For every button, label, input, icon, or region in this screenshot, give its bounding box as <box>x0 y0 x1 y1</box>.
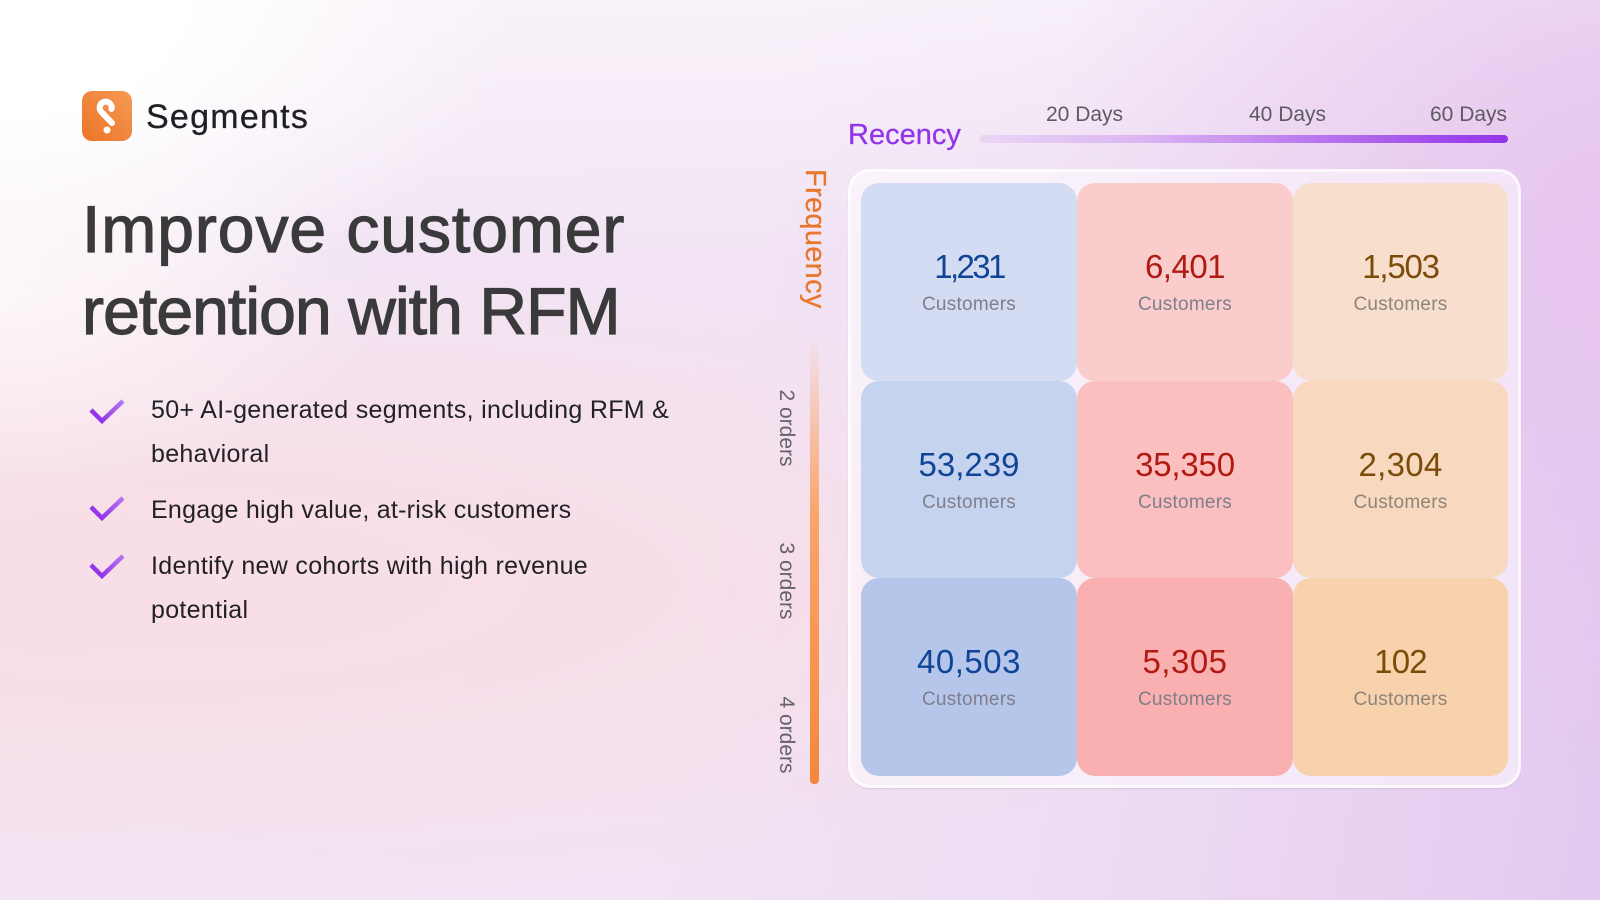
matrix cell 35,350: 35,350 <box>1135 446 1235 482</box>
matrix cell 1,231: 1,231 <box>934 248 1004 285</box>
matrix cell 102: Customers <box>1353 689 1448 710</box>
matrix cell 5,305: 5,305 <box>1142 643 1228 680</box>
frequency ticks <box>775 389 798 774</box>
matrix cell 40,503: 40,503 <box>917 643 1021 680</box>
matrix cell 1,231: Customers <box>922 294 1016 315</box>
matrix cell 5,305: Customers <box>1138 689 1232 710</box>
title <box>82 192 625 348</box>
matrix cell 2,304: 2,304 <box>1358 446 1443 482</box>
matrix cell 1,503: 1,503 <box>1362 248 1439 285</box>
title: retention with RFM <box>82 274 620 348</box>
matrix cell 102 <box>1293 578 1508 776</box>
matrix cell 2,304: Customers <box>1353 492 1448 512</box>
matrix cell 53,239: 53,239 <box>919 446 1019 482</box>
feature text 3: Identify new cohorts with high revenue <box>151 552 588 580</box>
feature text 1: behavioral <box>151 440 269 468</box>
feature text 1 <box>151 396 669 468</box>
recency label: Recency <box>848 119 961 151</box>
matrix cell 102: 102 <box>1374 643 1427 680</box>
frequency ticks: 4 orders <box>775 696 798 774</box>
feature text 1: 50+ AI-generated segments, including RFM & <box>151 396 669 424</box>
recency ticks <box>1046 103 1507 126</box>
icon: check 1 <box>90 400 124 424</box>
recency ticks: 20 Days <box>1046 103 1123 126</box>
matrix cell 6,401 <box>1077 183 1293 380</box>
recency ticks: 60 Days <box>1430 103 1507 126</box>
icon: Segments logo <box>82 91 132 141</box>
recency gradient bar <box>979 135 1508 143</box>
matrix cell 40,503 <box>861 578 1077 776</box>
frequency gradient bar <box>810 335 819 784</box>
feature text 2: Engage high value, at-risk customers <box>151 496 571 524</box>
matrix cell 6,401: 6,401 <box>1145 248 1225 285</box>
matrix cell 1,503 <box>1293 183 1508 380</box>
matrix cell 53,239 <box>861 380 1077 578</box>
matrix cell 5,305 <box>1077 578 1293 776</box>
matrix cell 40,503: Customers <box>922 689 1016 710</box>
matrix cell 1,231 <box>861 183 1077 380</box>
frequency ticks: 3 orders <box>775 542 798 620</box>
matrix cell 2,304 <box>1293 380 1508 578</box>
frequency label: Frequency <box>799 169 831 309</box>
feature text 3: potential <box>151 596 248 624</box>
matrix cell 6,401: Customers <box>1138 294 1232 315</box>
recency ticks: 40 Days <box>1249 103 1326 126</box>
brand name: Segments <box>146 98 309 136</box>
panel: RFM matrix <box>848 169 1521 788</box>
matrix cell 35,350: Customers <box>1138 492 1232 512</box>
title: Improve customer <box>82 192 625 266</box>
matrix cell 1,503: Customers <box>1353 294 1448 315</box>
icon: check 2 <box>90 496 124 522</box>
icon: check 3 <box>90 554 124 580</box>
frequency ticks: 2 orders <box>775 389 798 467</box>
matrix cell 53,239: Customers <box>922 492 1016 512</box>
matrix cell 35,350 <box>1077 380 1293 578</box>
feature text 3 <box>151 552 588 624</box>
